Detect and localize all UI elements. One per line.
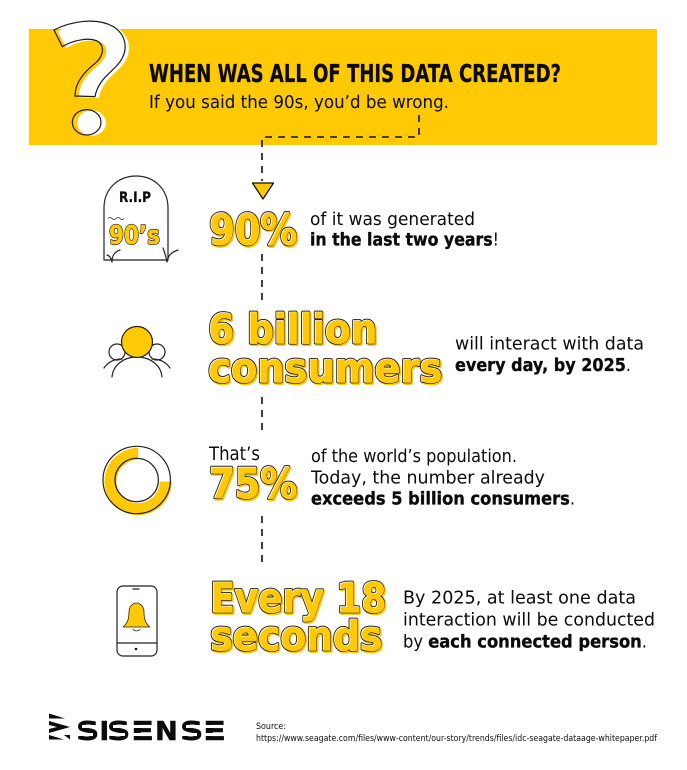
stat: 6 billion consumers: consumers <box>208 344 442 392</box>
logo: Sisense <box>49 714 227 747</box>
text: consumers description: will interact with data <box>455 334 644 354</box>
stat: 75%: 75% <box>209 459 297 508</box>
stat: every 18 seconds: Every 18 <box>211 574 387 622</box>
text: population description: Today, the number already <box>310 468 545 488</box>
stat: 6 billion consumers: consumers <box>209 344 443 392</box>
logo: Sisense: E <box>203 717 226 747</box>
logo: Sisense: S <box>180 716 203 746</box>
text: consumers description: every day, by 2025. <box>455 355 631 376</box>
stat: every 18 seconds: Every 18 <box>212 576 388 624</box>
icon: gravestone <box>104 176 178 262</box>
stat: 6 billion consumers: 6 billion <box>208 305 377 353</box>
stat: every 18 seconds: seconds <box>210 612 382 660</box>
source: Source: <box>256 722 286 732</box>
stat: 90%: 90% <box>210 206 298 256</box>
text: 90% description: in the last two years! <box>310 230 499 250</box>
text: population description: of the world’s population. <box>311 446 517 467</box>
stat: 90%: 90% <box>210 207 298 257</box>
icon: people <box>104 326 170 377</box>
text: population description <box>310 446 575 510</box>
logo: Sisense: S <box>107 716 130 746</box>
stat: every 18 seconds: Every 18 <box>210 574 386 622</box>
logo: Sisense: N <box>155 717 178 747</box>
icon: donut chart <box>103 446 172 515</box>
text: interaction description: By 2025, at least one data <box>403 588 636 608</box>
stat: 75%: 75% <box>210 460 298 508</box>
source <box>256 722 658 744</box>
text: 90% description <box>310 209 499 250</box>
stat: 6 billion consumers: consumers <box>208 344 442 392</box>
text: interaction description: by each connected person. <box>403 632 647 652</box>
arrow: dashed connector <box>252 115 419 564</box>
stat: 6 billion consumers <box>208 305 444 394</box>
stat: 90%: 90% <box>209 206 297 256</box>
stat: 90%: 90% <box>209 206 297 256</box>
stat: every 18 seconds: seconds <box>210 612 382 660</box>
logo: Sisense: S <box>76 716 99 746</box>
icon: question mark <box>54 21 129 136</box>
text: population description: exceeds 5 billion consumers. <box>311 488 575 510</box>
icon: gravestone: R.I.P <box>119 190 151 206</box>
stat: 6 billion consumers: 6 billion <box>209 306 378 354</box>
source: https://www.seagate.com/files/www-content/our-story/trends/files/idc-seagate-dataage-whitepaper.pdf <box>256 734 658 744</box>
text: interaction description <box>403 588 655 652</box>
stat: every 18 seconds: Every 18 <box>210 574 386 622</box>
stat: 6 billion consumers: consumers <box>210 346 444 394</box>
stat: every 18 seconds: seconds <box>212 614 384 662</box>
text: interaction description: interaction will be conducted <box>403 610 655 630</box>
icon: gravestone: 90’s <box>109 221 160 251</box>
text: that's: That’s <box>208 443 260 465</box>
logo: Sisense: E <box>131 717 154 747</box>
icon: phone with bell <box>117 586 157 656</box>
stat: 6 billion consumers: 6 billion <box>208 305 377 353</box>
stat: 75%: 75% <box>209 459 297 508</box>
logo: Sisense: I <box>100 717 109 747</box>
stat: every 18 seconds <box>210 574 388 662</box>
icon: gravestone: 90’s <box>109 221 160 251</box>
text: 90% description: of it was generated <box>310 209 475 230</box>
stat: 6 billion consumers: 6 billion <box>210 306 378 354</box>
stat: every 18 seconds: seconds <box>211 612 383 660</box>
stat: 75%: 75% <box>210 460 298 510</box>
subtitle: If you said the 90s, you’d be wrong. <box>149 93 449 113</box>
text: consumers description <box>455 334 644 376</box>
header banner <box>29 29 657 145</box>
